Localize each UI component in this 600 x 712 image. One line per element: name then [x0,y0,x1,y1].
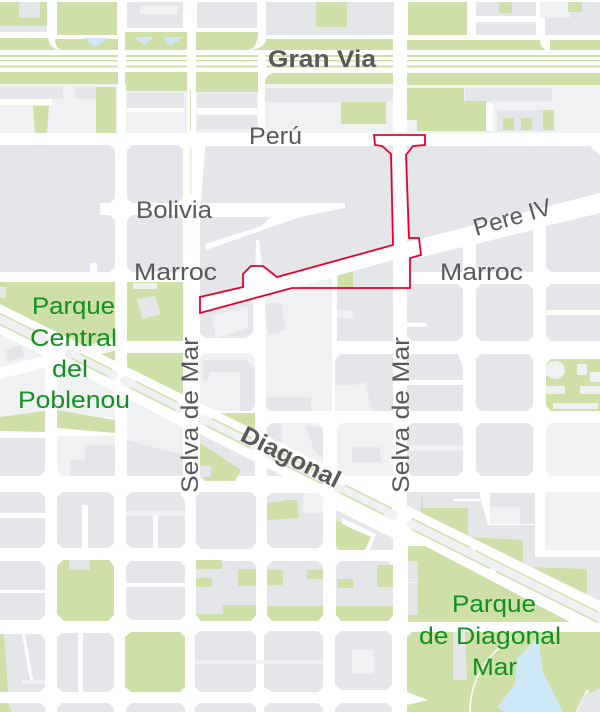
label: Selva de Mar east: Selva de Mar [388,337,415,493]
block: east light block [546,423,600,476]
blocks: grid row 560-621 [0,560,393,621]
label: Parque Central del Poblenou: Parque [32,293,115,320]
base: top district north of Gran Via [0,2,600,51]
road: Pere IV [200,193,600,313]
label: Marroc east: Marroc [440,259,523,286]
label: Perú: Perú [249,123,302,150]
water: lake in Parque de Diagonal Mar [497,635,563,712]
blocks: west of Selva de Mar, upper row [0,145,183,272]
blocks: east grid [407,213,600,476]
blocks: southwest of the Diagonal [0,330,184,476]
labels: parks [18,293,561,681]
base: strip south of Gran Via [0,72,600,133]
label: Gran Via: Gran Via [268,46,377,73]
labels: streets [134,46,555,494]
park: Parque de Diagonal Mar [407,546,600,712]
park: Parque Central del Poblenou lawns [0,282,184,410]
blocks: bottom row [0,703,392,712]
label: Parque de Diagonal Mar: de Diagonal [419,623,561,650]
block: large block north of Pere IV [200,146,600,298]
blocks: grid row 632-692 [0,631,392,692]
blocks: northeast of the Diagonal at Diagonal Mar [407,492,600,610]
label: Marroc west: Marroc [134,259,217,286]
label: Parque Central del Poblenou: del [52,356,88,383]
label: Parque de Diagonal Mar: Mar [472,654,517,681]
blocks: grid row 492-548 [0,492,323,549]
label: Parque Central del Poblenou: Poblenou [18,387,130,414]
label: Parque de Diagonal Mar: Parque [452,591,536,618]
label: Parque de Diagonal Mar [419,591,561,681]
blocks: between Selva de Mar and the vertical street at x=260 [200,258,393,411]
label: Parque Central del Poblenou: Central [30,325,117,352]
block: east courtyard garden [545,359,600,411]
label: Parque Central del Poblenou [18,293,130,414]
blocks: wedge at Selva and the Diagonal [336,510,393,550]
label: Selva de Mar west: Selva de Mar [177,337,204,493]
road lines inside east blocks [407,310,600,385]
road: Diagonal avenue [0,304,600,635]
label: Bolivia: Bolivia [136,197,213,224]
road: Bolivia [200,203,345,250]
route outline: red project area [200,135,425,313]
road: Gran Via carriageways [0,50,600,72]
blocks: middle row south of the Diagonal corridor [267,423,393,476]
park: green wedge beside the Diagonal [200,413,323,490]
label: Diagonal: Diagonal [236,421,345,494]
label: Pere IV: Pere IV [470,194,555,242]
road: vertical streets [117,0,546,712]
